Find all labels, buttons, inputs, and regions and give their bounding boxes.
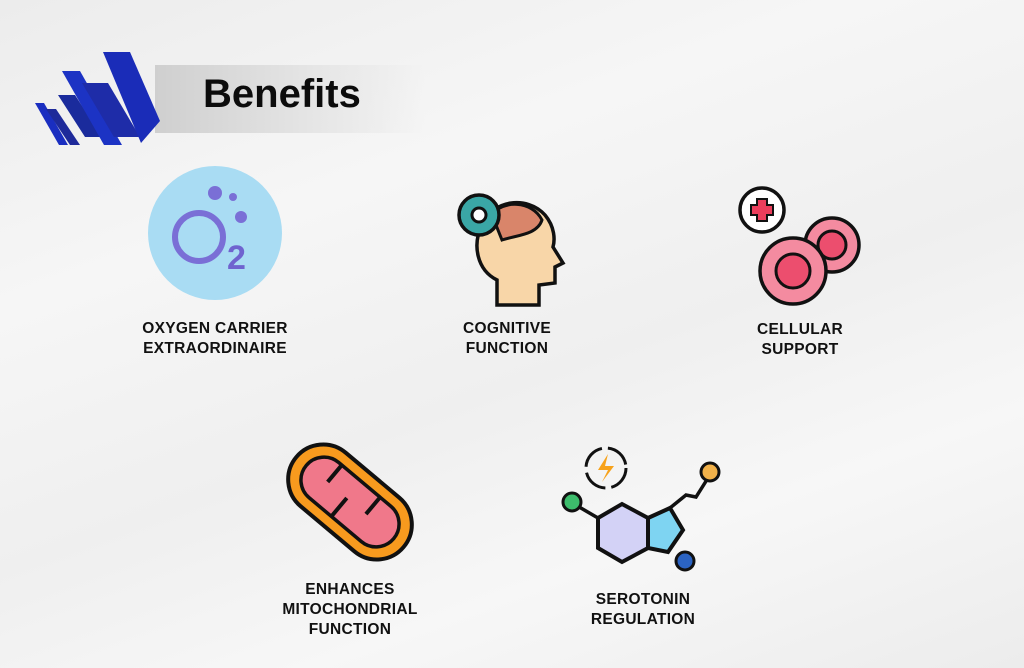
icon: head with gear [457, 193, 566, 307]
label [282, 581, 418, 638]
icon: O2 [148, 166, 282, 300]
icon: O2: 2 [227, 239, 246, 277]
icon: mitochondrion [286, 442, 414, 562]
header: logo and title [35, 52, 364, 145]
icon: logo bars [35, 52, 160, 145]
item: cellular [738, 186, 861, 358]
label: CELLULAR [757, 321, 843, 338]
label [463, 320, 551, 357]
item: oxygen [142, 166, 288, 357]
label: REGULATION [591, 611, 695, 628]
title: Benefits [203, 72, 361, 116]
item: mitochondria [282, 442, 418, 638]
icon: serotonin molecule [562, 446, 720, 572]
label: SUPPORT [761, 341, 839, 358]
title band [155, 65, 425, 133]
label: MITOCHONDRIAL [282, 601, 418, 618]
item: cognitive [457, 193, 566, 357]
label: ENHANCES [305, 581, 395, 598]
label [757, 321, 843, 358]
label: SEROTONIN [596, 591, 690, 608]
label: FUNCTION [309, 621, 391, 638]
label: COGNITIVE [463, 320, 551, 337]
icon: blood cells [738, 186, 861, 306]
item: serotonin [562, 446, 720, 628]
label [142, 320, 288, 357]
label: OXYGEN CARRIER [142, 320, 288, 337]
label: EXTRAORDINAIRE [143, 340, 287, 357]
label: FUNCTION [466, 340, 548, 357]
label [591, 591, 695, 628]
